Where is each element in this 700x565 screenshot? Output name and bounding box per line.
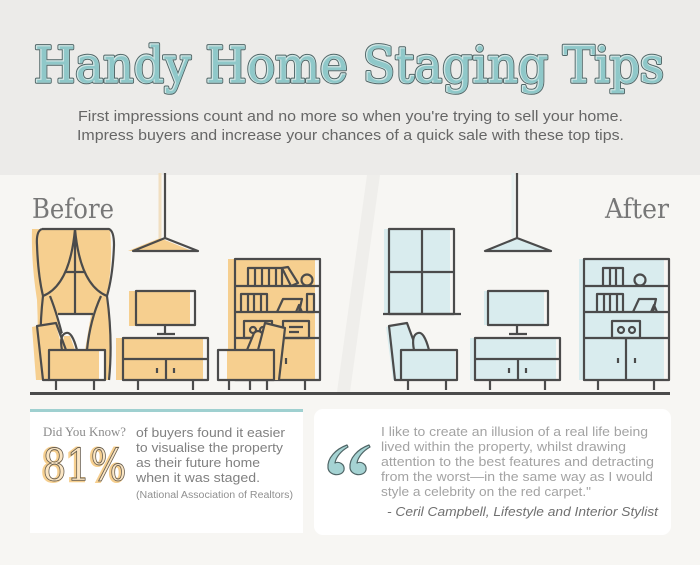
- stat description: as their future home: [136, 455, 260, 470]
- second armchair: [218, 323, 285, 390]
- label: did you know: Did You Know?: [43, 425, 126, 439]
- quote text: from the worst—in the same way as I would: [381, 469, 653, 484]
- statistic: 81%: 81%: [41, 441, 125, 492]
- statistic: 81%: 81%: [42, 440, 126, 492]
- bookcase: [579, 259, 669, 390]
- title: Handy Home Staging Tips: [34, 36, 664, 94]
- quote text: lived within the property, whilst drawing: [381, 439, 626, 454]
- quote text: attention to the best features and detracting: [381, 454, 654, 469]
- window: [383, 229, 461, 314]
- heading: before: Before: [32, 194, 114, 225]
- bookcase: [228, 259, 320, 390]
- tv stand: [470, 338, 560, 390]
- curtained window: [32, 229, 114, 380]
- armchair: [32, 322, 105, 390]
- stat description: when it was staged.: [135, 470, 260, 485]
- pendant lamp: [128, 173, 198, 251]
- source: (National Association of Realtors): [136, 490, 293, 501]
- stat description: to visualise the property: [136, 440, 284, 455]
- panel: before room: [32, 173, 320, 390]
- television: [484, 291, 548, 334]
- television: [129, 291, 195, 334]
- intro text: First impressions count and no more so when you're trying to sell your home.: [78, 109, 623, 125]
- quote text: [381, 424, 654, 499]
- quote text: I like to create an illusion of a real life being: [381, 424, 648, 439]
- intro text: Impress buyers and increase your chances of a quick sale with these top tips.: [77, 128, 624, 144]
- icon: quotation marks: [328, 445, 370, 475]
- panel: quote: [314, 409, 671, 535]
- pendant lamp: [485, 173, 551, 251]
- quote text: style a celebrity on the red carpet.": [381, 484, 591, 499]
- title: Handy Home Staging Tips: [34, 36, 664, 94]
- intro text: [77, 109, 624, 144]
- floor line: [30, 392, 670, 395]
- armchair: [386, 323, 457, 390]
- title: Handy Home Staging Tips: [35, 36, 665, 94]
- heading: after: After: [604, 194, 669, 225]
- panel: after room: [383, 173, 669, 390]
- panel: did you know: [30, 409, 303, 533]
- attribution: - Ceril Campbell, Lifestyle and Interior Stylist: [387, 504, 659, 519]
- stat description: [135, 425, 286, 485]
- stat description: of buyers found it easier: [136, 425, 286, 440]
- tv stand: [116, 338, 208, 390]
